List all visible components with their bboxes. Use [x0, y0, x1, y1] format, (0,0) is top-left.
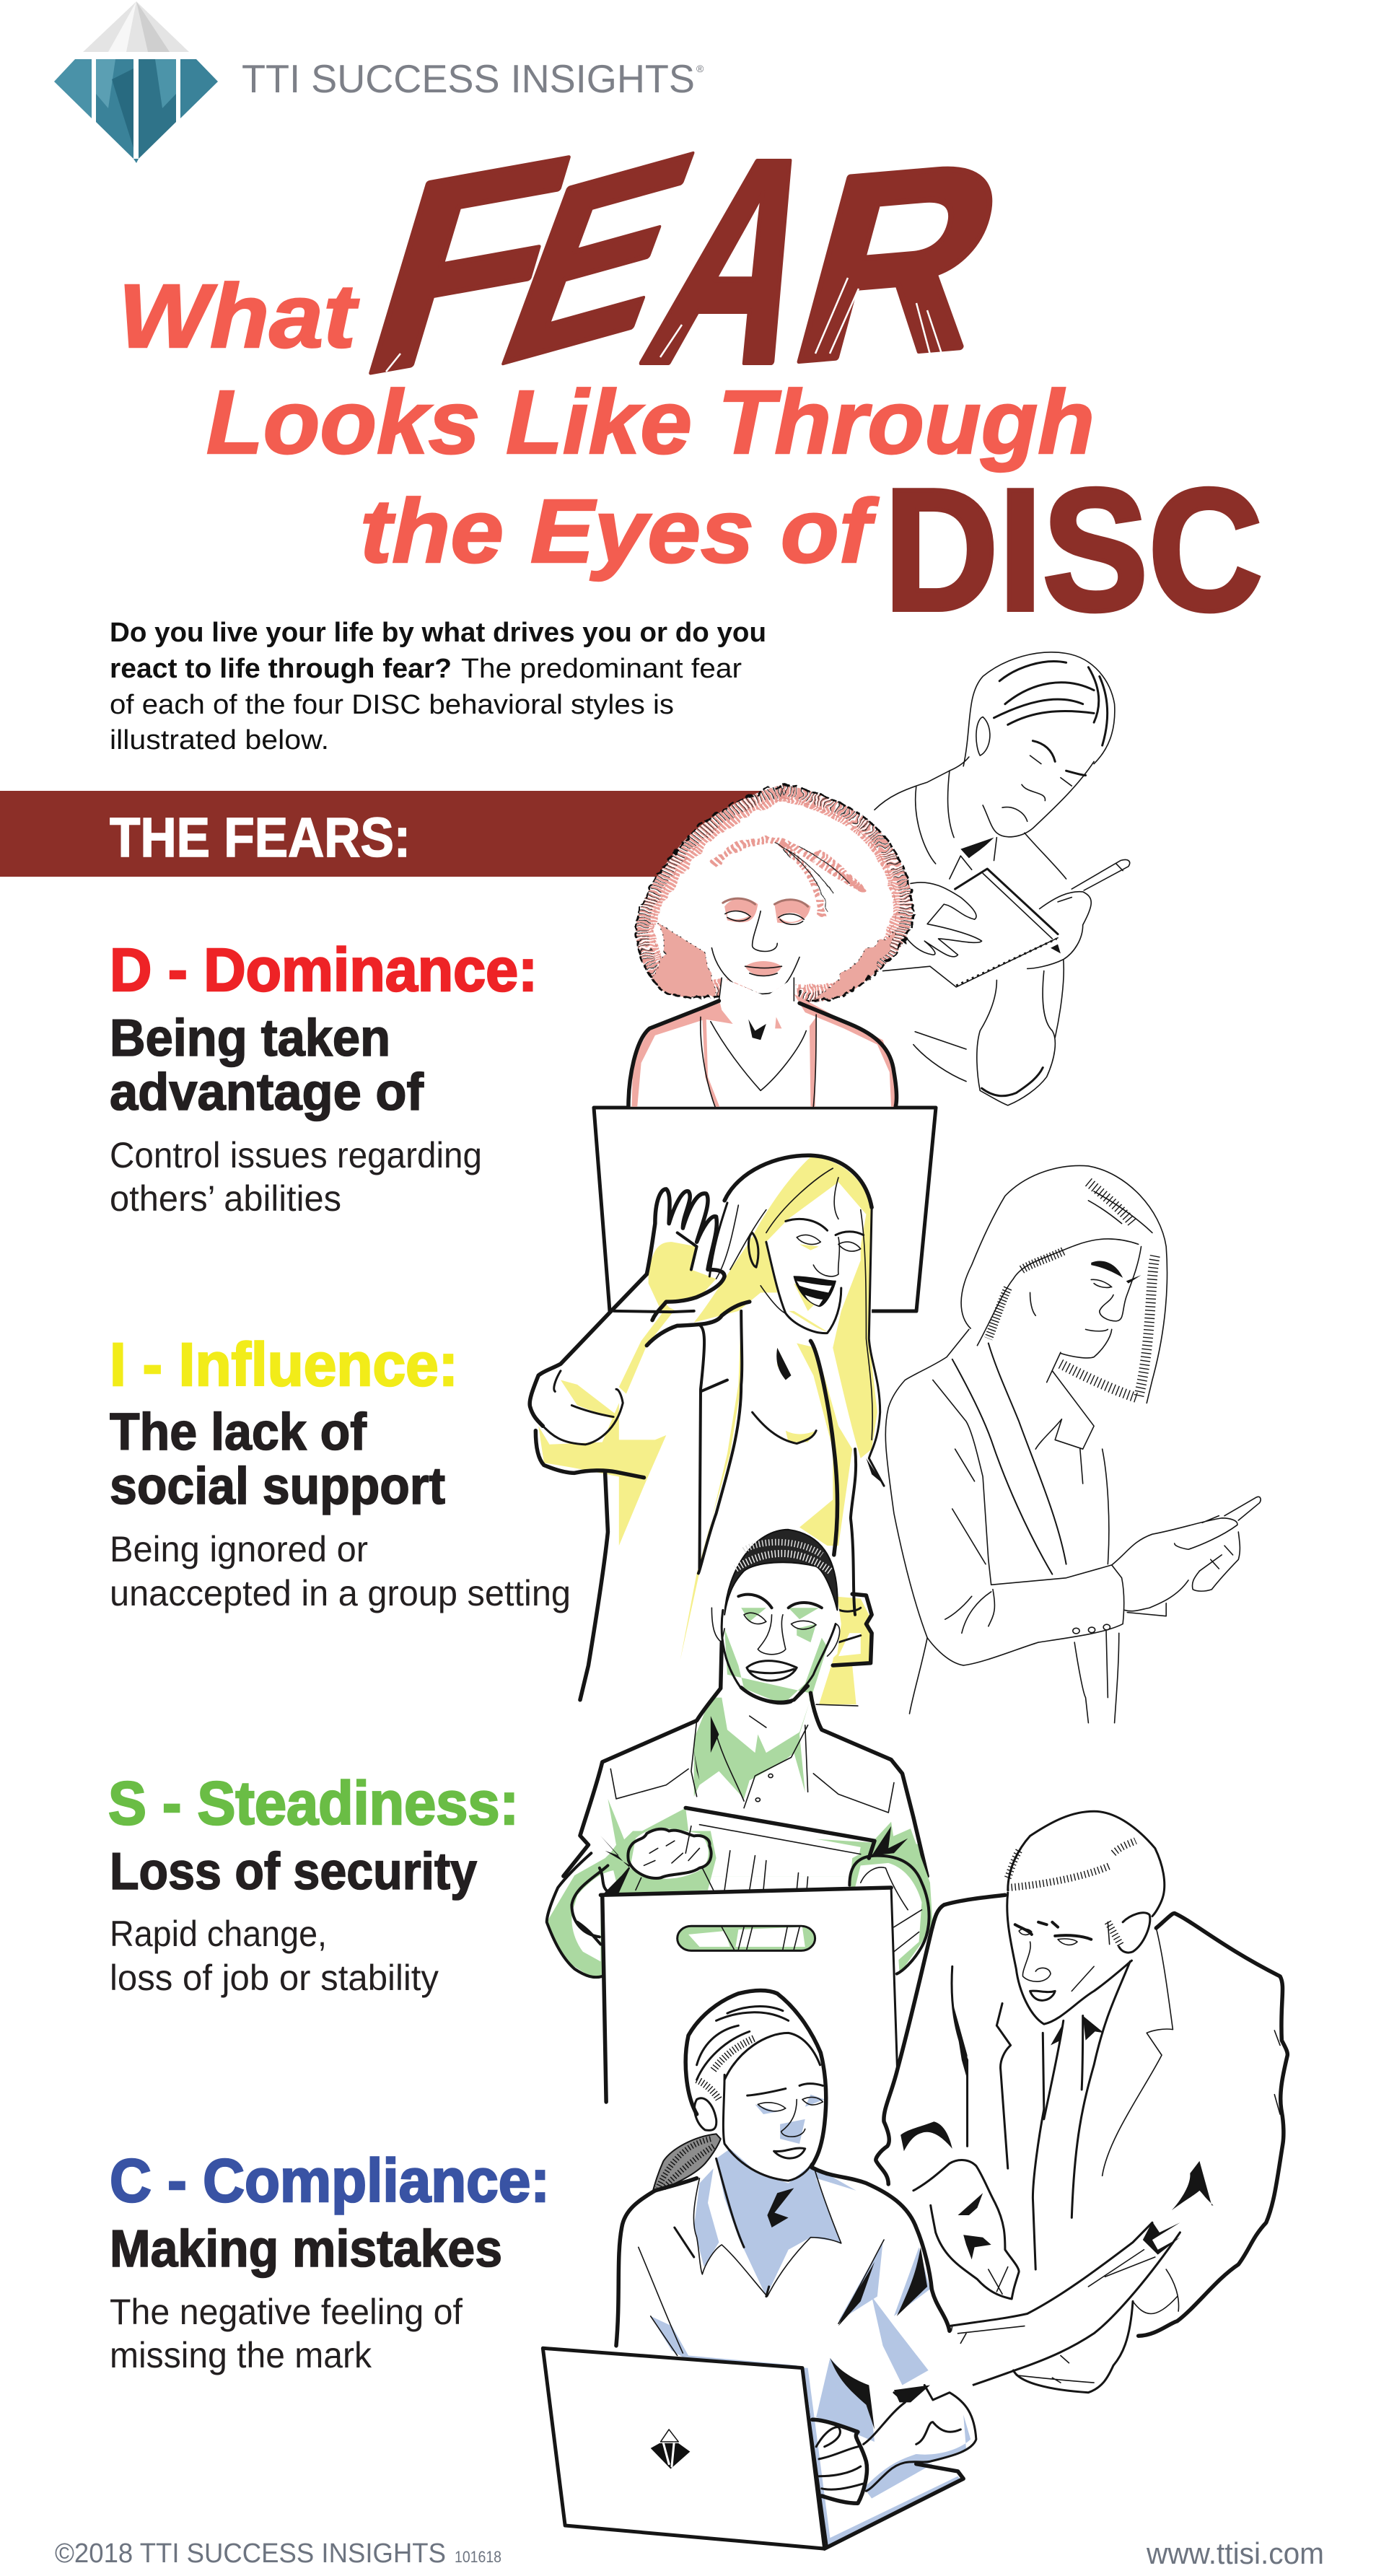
D heading: D - Dominance:	[110, 936, 538, 1004]
silhouette	[530, 1155, 883, 1707]
D description	[110, 1135, 482, 1219]
I description: Being ignored or	[110, 1529, 368, 1569]
C description: missing the mark	[110, 2335, 372, 2375]
C description: The negative feeling of	[110, 2292, 463, 2332]
hair and head	[652, 1990, 826, 2193]
hand	[812, 2419, 867, 2503]
title: Looks Like Through: Looks Like Through	[206, 372, 1095, 473]
I description: unaccepted in a group setting	[110, 1573, 571, 1613]
box handle	[678, 1926, 815, 1950]
shirt lines	[616, 2158, 976, 2491]
registered mark: ®	[696, 63, 704, 74]
D fear	[110, 1009, 424, 1121]
S description: Rapid change,	[110, 1914, 327, 1954]
illustration: woman with afro (D)	[628, 784, 913, 1107]
logo: TTI diamond	[54, 1, 218, 163]
line work	[724, 1155, 872, 1207]
illustration: board held by D woman	[594, 1108, 936, 1311]
D description: Control issues regarding	[110, 1135, 482, 1175]
title: DISC: DISC	[884, 453, 1263, 647]
title: the Eyes of: the Eyes of	[360, 481, 880, 582]
C fear: Making mistakes	[110, 2220, 502, 2278]
footer copyright: ©2018 TTI SUCCESS INSIGHTS	[55, 2538, 446, 2569]
title: FEAR brush word: F	[336, 97, 595, 434]
section D	[110, 936, 538, 1219]
blue shading	[694, 2095, 856, 2297]
illustration: laughing woman (I)	[530, 1155, 884, 1707]
title: FEAR brush word: R	[768, 106, 1031, 419]
C heading: C - Compliance:	[110, 2147, 550, 2214]
D fear: advantage of	[110, 1064, 424, 1121]
intro paragraph	[110, 618, 766, 755]
lower body, plant, documents, box	[547, 1808, 933, 2149]
S fear: Loss of security	[110, 1843, 477, 1901]
illustration: woman at laptop (C)	[543, 1990, 977, 2549]
illustration: man holding box (S)	[547, 1530, 933, 2149]
S description	[110, 1914, 439, 1998]
footer url: www.ttisi.com	[1146, 2536, 1324, 2570]
I fear: The lack of	[110, 1403, 367, 1461]
carrying box	[600, 1888, 898, 2149]
section S	[108, 1769, 519, 1998]
illustration: man with notepad (D, back)	[875, 652, 1130, 1105]
laptop logo	[651, 2430, 690, 2469]
I heading: I - Influence:	[110, 1331, 458, 1398]
footer code: 101618	[455, 2548, 501, 2566]
intro paragraph: react to life through fear?	[110, 654, 452, 684]
illustration: standing man in suit (C, back)	[875, 1811, 1287, 2399]
intro paragraph: of each of the four DISC behavioral styles is	[110, 690, 674, 720]
title: FEAR brush word	[336, 96, 1031, 434]
intro paragraph: The predominant fear	[461, 654, 742, 684]
neck and shoulders	[628, 978, 897, 1107]
heading: the fears: THE FEARS:	[110, 807, 411, 869]
heading band	[0, 791, 765, 877]
face	[708, 852, 818, 996]
title: FEAR brush word: A	[616, 98, 864, 424]
title: What: What	[118, 266, 359, 367]
upper body	[564, 1530, 927, 1876]
yellow shading	[694, 1157, 877, 1458]
title: FEAR brush word: E	[469, 96, 725, 421]
title	[118, 96, 1263, 647]
C description	[110, 2292, 463, 2375]
section I	[110, 1331, 571, 1613]
illustration: woman with phone (I, back)	[885, 1165, 1261, 1723]
D description: others’ abilities	[110, 1178, 341, 1219]
afro hair	[636, 784, 913, 1002]
title: FEAR dry-brush streaks	[386, 278, 942, 372]
S description: loss of job or stability	[110, 1958, 439, 1998]
intro paragraph: illustrated below.	[110, 725, 329, 755]
D fear: Being taken	[110, 1009, 390, 1067]
section C	[110, 2147, 550, 2375]
I fear	[110, 1403, 445, 1515]
S heading: S - Steadiness:	[108, 1769, 519, 1837]
brand name: TTI SUCCESS INSIGHTS	[242, 56, 695, 101]
I description	[110, 1529, 571, 1613]
laptop	[543, 2348, 963, 2549]
I fear: social support	[110, 1458, 445, 1515]
intro paragraph: Do you live your life by what drives you or do you	[110, 618, 766, 648]
